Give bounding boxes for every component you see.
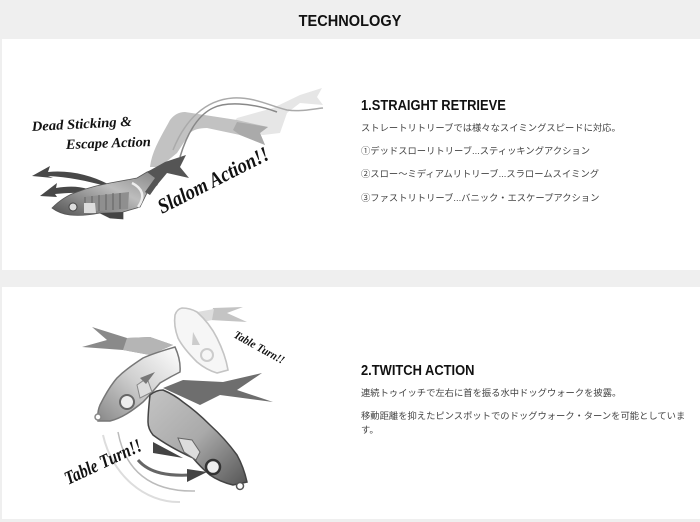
faded top fish (175, 307, 247, 373)
panel: twitch action (2, 287, 700, 519)
text: item 3: ③ファストリトリーブ...バニック・エスケープアクション (361, 193, 599, 203)
caption: table turn lower: Table Turn!! (61, 435, 145, 490)
caption: dead sticking (30, 115, 151, 153)
caption: table turn upper: Table Turn!! (232, 329, 286, 367)
caption: slalom action: Slalom Action!! (153, 142, 273, 218)
title: TECHNOLOGY (299, 13, 401, 30)
middle fish (82, 327, 180, 421)
caption: dead sticking: Dead Sticking & (30, 115, 132, 135)
caption: dead sticking: Escape Action (65, 135, 151, 153)
panel: straight retrieve (2, 39, 700, 270)
text: twitch line 1: 連続トゥイッチで左右に首を振る水中ドッグウォークを披露。 (361, 388, 621, 398)
text: twitch line 2: 移動距離を抑えたピンスポットでのドッグウォーク・ターンを可能としています。 (361, 411, 685, 435)
main fish (52, 155, 189, 219)
text: item 2: ②スロー～ミディアムリトリーブ...スラロームスイミング (361, 169, 599, 179)
front fish (148, 373, 273, 490)
text: straight retrieve intro: ストレートリトリーブでは様々なスイミングスピードに対応。 (361, 123, 621, 133)
faded fish and arcs (150, 88, 323, 167)
text: item 1: ①デッドスローリトリーブ...スティッキングアクション (361, 146, 590, 156)
turn arrow and motion lines (103, 432, 207, 502)
heading: twitch action: 2.TWITCH ACTION (361, 363, 475, 379)
heading: straight retrieve: 1.STRAIGHT RETRIEVE (361, 98, 506, 114)
swim arrows (32, 166, 108, 197)
